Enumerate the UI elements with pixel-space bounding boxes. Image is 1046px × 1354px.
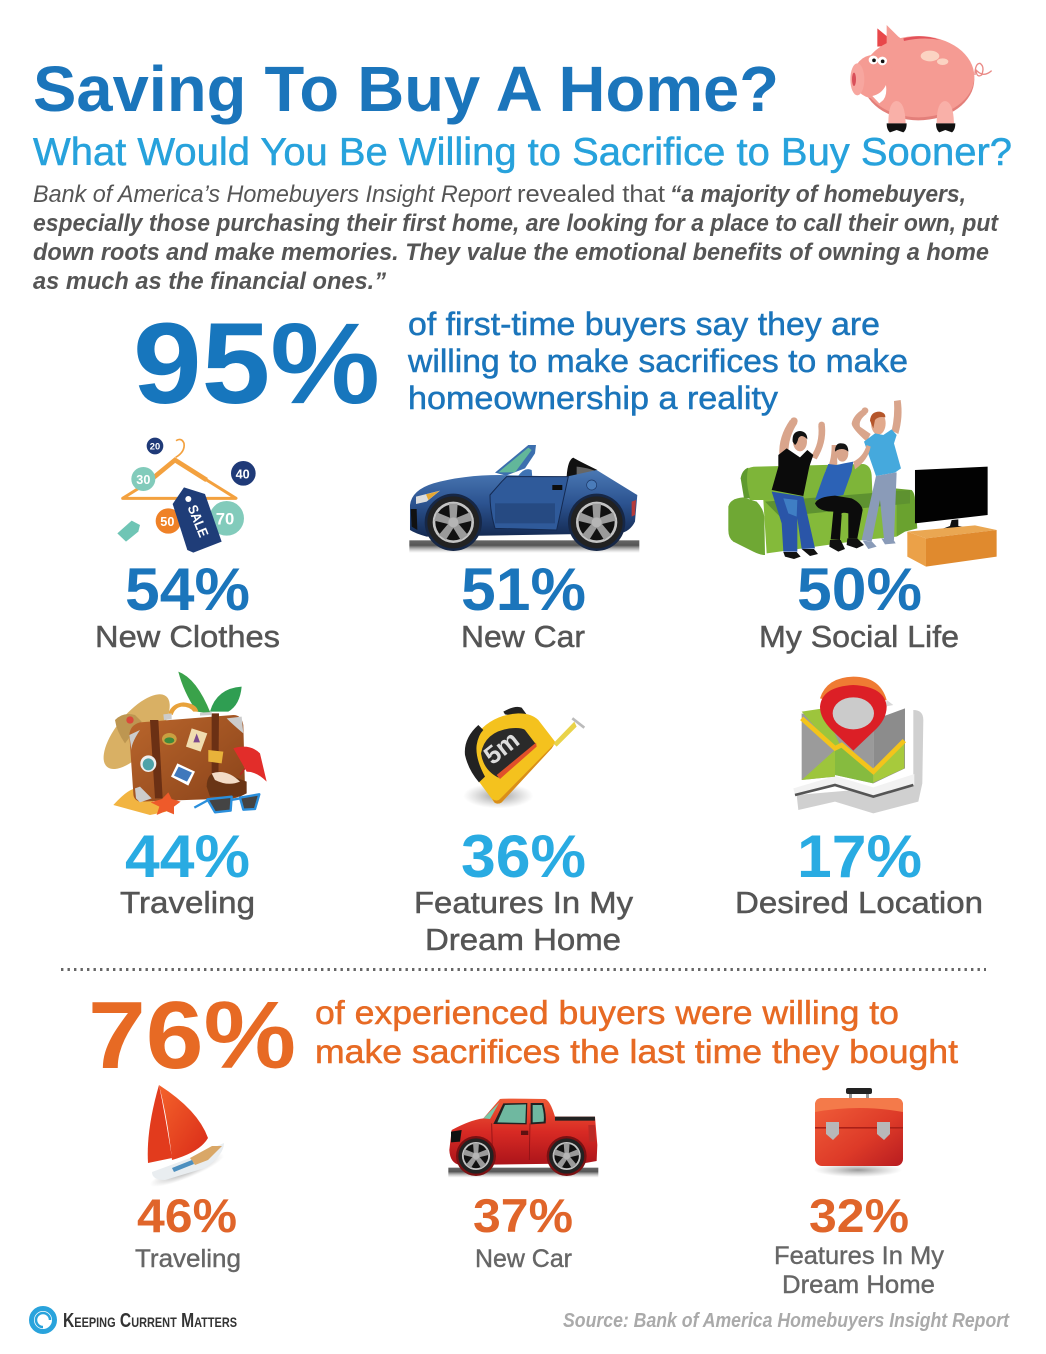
icon: map with location pin [793,677,923,813]
stat: 32% features in my dream home: Dream Home [782,1271,935,1299]
title: Saving To Buy A Home? [33,53,779,125]
stat: 54% new clothes [95,556,280,654]
stat: 36% features in my dream home: 36% [461,823,586,890]
stat: 44% traveling [120,823,255,920]
stat: 50% my social life: My Social Life [759,619,959,654]
stat: 54% new clothes: New Clothes [95,619,280,654]
stat: 37% new car: 37% [473,1189,573,1242]
stat: 32% features in my dream home: Features In My [774,1242,944,1270]
man in blue shirt [815,443,871,552]
stat: 36% features in my dream home: Features In My [414,885,634,920]
intro text block: revealed that [517,181,665,208]
stat: 32% features in my dream home: 32% [809,1189,909,1242]
first-time buyers statement: of first-time buyers say they are [408,306,880,342]
icon: clothes hanger with sale tags: 40 [236,467,250,481]
stat: 32% features in my dream home [774,1189,944,1299]
stat: 37% new car: New Car [475,1245,572,1273]
intro text block: Bank of America’s Homebuyers Insight Report [33,181,512,208]
icon: red pickup truck [448,1099,598,1178]
intro text block: “a majority of homebuyers, [670,181,966,208]
icon: blue convertible car [409,445,639,553]
man in black shirt [772,417,825,559]
icon: friends cheering on couch with TV [728,400,997,567]
intro text block: as much as the financial ones.” [33,268,386,295]
TV stand [907,525,997,567]
stat: 44% traveling: 44% [125,823,250,890]
stat: 44% traveling: Traveling [120,885,255,920]
stat: 36% features in my dream home [414,823,634,957]
icon: clothes hanger with sale tags: 50 [160,515,174,529]
intro text block: especially those purchasing their first home, are looking for a place to call their own, put [33,210,999,237]
experienced buyers statement [315,994,958,1070]
logo: Keeping Current Matters: Keeping Current Matters [63,1310,237,1332]
stat: 51% new car [461,556,586,654]
logo: Keeping Current Matters [32,1308,237,1332]
first-time buyers statement: willing to make sacrifices to make [407,343,908,379]
intro text block: down roots and make memories. They value the emotional benefits of owning a home [33,239,989,266]
big stat: 76%: 76% [88,982,296,1089]
icon: red toolbox [814,1088,903,1177]
experienced buyers statement: of experienced buyers were willing to [315,994,899,1031]
stat: 17% desired location [735,823,983,920]
icon: tape measure: 5m [479,726,525,770]
icon: tape measure [463,707,584,808]
television [915,467,988,532]
stat: 37% new car [473,1189,573,1273]
icon: piggy bank [850,25,992,132]
big stat: 95%: 95% [133,300,380,428]
stat: 46% traveling: 46% [137,1189,237,1242]
stat: 50% my social life [759,556,959,654]
icon: clothes hanger with sale tags [117,438,256,553]
stat: 50% my social life: 50% [797,556,922,623]
stat: 51% new car: New Car [461,619,585,654]
stat: 36% features in my dream home: Dream Home [425,922,621,957]
icon: clothes hanger with sale tags: 70 [216,509,234,528]
icon: clothes hanger with sale tags: 30 [136,473,150,487]
man in light blue shirt [852,400,902,549]
stat: 51% new car: 51% [461,556,586,623]
intro text block [33,181,999,295]
first-time buyers statement [407,306,908,416]
stat: 46% traveling [135,1189,241,1273]
first-time buyers statement: homeownership a reality [408,380,778,416]
stat: 17% desired location: 17% [797,823,922,890]
stat: 54% new clothes: 54% [125,556,250,623]
icon: sailboat [147,1085,227,1192]
icon: clothes hanger with sale tags: SALE [185,502,212,539]
icon: suitcase [92,672,267,815]
experienced buyers statement: make sacrifices the last time they bought [315,1033,958,1070]
icon: clothes hanger with sale tags: 20 [150,442,160,452]
stat: 17% desired location: Desired Location [735,885,983,920]
stat: 46% traveling: Traveling [135,1245,241,1273]
subtitle: What Would You Be Willing to Sacrifice to Buy Sooner? [33,131,1012,174]
